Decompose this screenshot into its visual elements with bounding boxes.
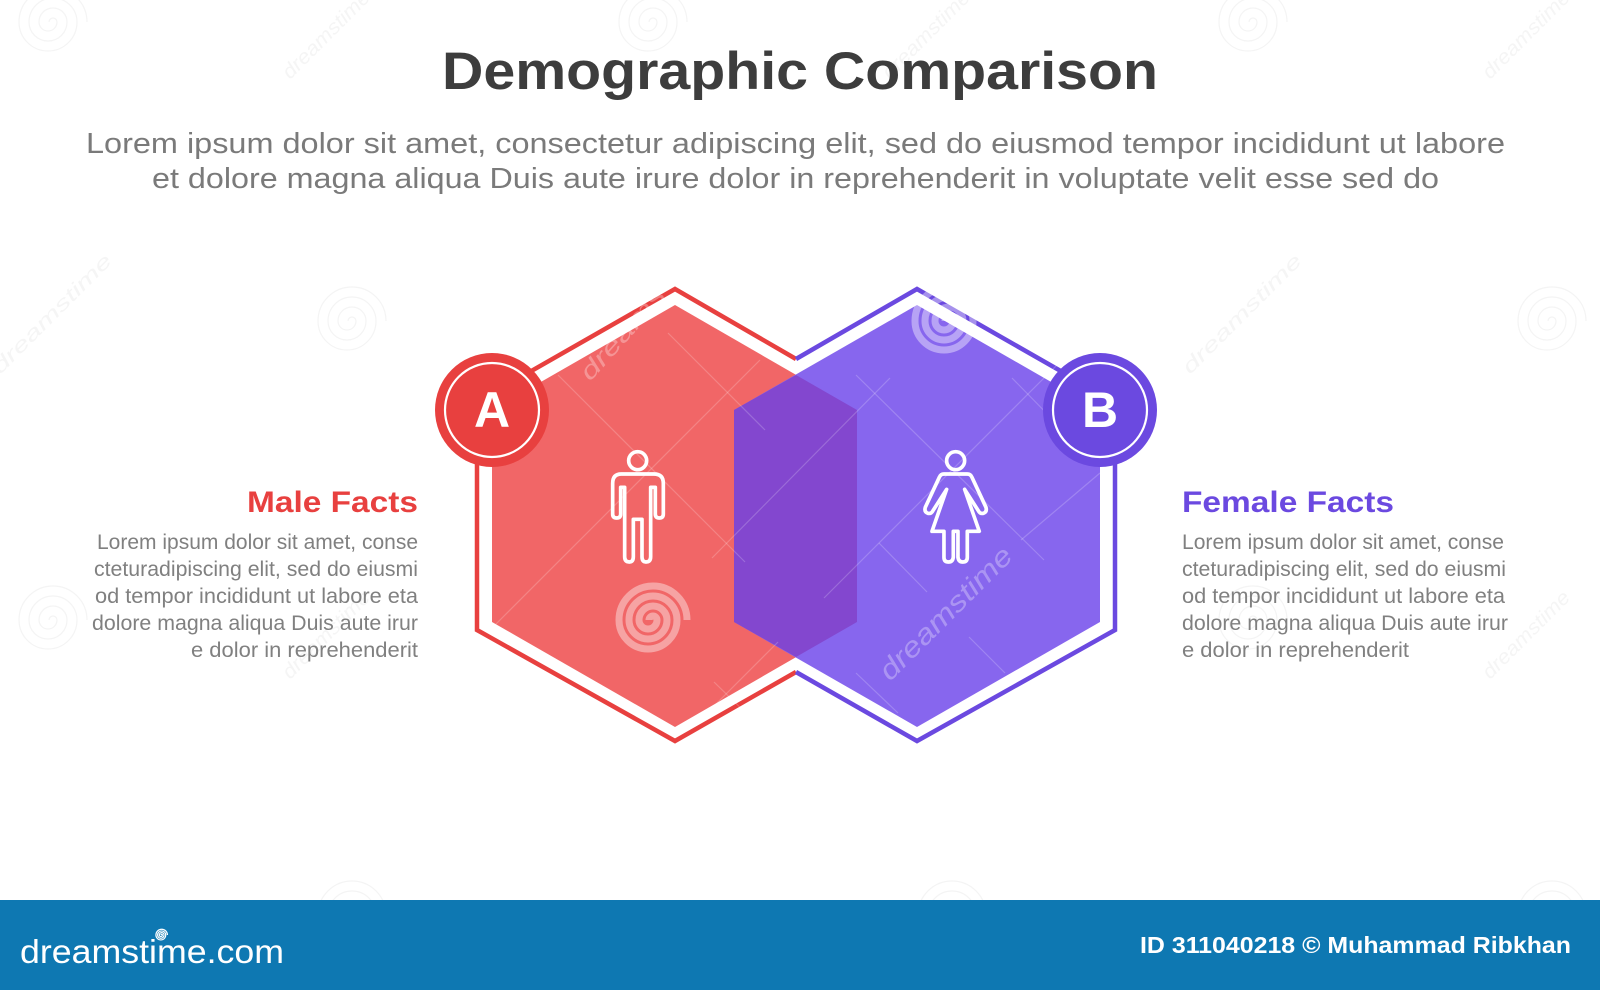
icon: man (613, 452, 663, 562)
badge A: A (474, 382, 510, 438)
watermark spirals on hexagons (619, 287, 983, 649)
text block: male facts: cteturadipiscing elit, sed do eiusmi (94, 558, 418, 581)
text block: female facts: Lorem ipsum dolor sit amet, conse (1182, 531, 1504, 554)
text block: male facts (92, 531, 418, 662)
hexagon A: outline (477, 289, 796, 741)
subtitle: Lorem ipsum dolor sit amet, consectetur adipiscing elit, sed do eiusmod tempor incididunt ut labore (86, 128, 1505, 160)
title: Demographic Comparison (442, 42, 1158, 101)
panel: female facts (1182, 486, 1508, 662)
footer logo: dreamstime.com (20, 933, 284, 970)
overlap area (734, 375, 857, 657)
hexagon diagram (435, 282, 1157, 741)
hexagon B: outline (796, 289, 1115, 741)
text block: female facts (1182, 531, 1508, 662)
text block: female facts: cteturadipiscing elit, sed do eiusmi (1182, 558, 1506, 581)
subtitle: et dolore magna aliqua Duis aute irure dolor in reprehenderit in voluptate velit esse sed do (152, 163, 1439, 195)
watermark text on background: dreamstime (1478, 587, 1575, 684)
watermark text on hexagons: dreamstime (872, 540, 1019, 686)
heading: female facts: Female Facts (1182, 486, 1394, 519)
text block: male facts: Lorem ipsum dolor sit amet, conse (97, 531, 418, 554)
watermark text on hexagons: dreams (574, 282, 671, 386)
text block: male facts: e dolor in reprehenderit (191, 639, 418, 662)
watermark lines on hexagons (493, 332, 1100, 717)
text block: female facts: dolore magna aliqua Duis aute irur (1182, 612, 1508, 635)
badge A (435, 353, 549, 467)
text block: female facts: od tempor incididunt ut labore eta (1182, 585, 1505, 608)
subtitle (86, 128, 1505, 195)
panel: male facts (92, 486, 418, 662)
badge B: B (1082, 382, 1118, 438)
hexagon B: fill (734, 305, 1100, 727)
text block: male facts: dolore magna aliqua Duis aute irur (92, 612, 418, 635)
watermark text on background: dreamstime (1178, 250, 1307, 379)
text block: female facts: e dolor in reprehenderit (1182, 639, 1409, 662)
footer bar (0, 900, 1600, 990)
footer credit: ID 311040218 © Muhammad Ribkhan (1140, 932, 1571, 958)
text block: male facts: od tempor incididunt ut labore eta (95, 585, 418, 608)
badge B (1043, 353, 1157, 467)
hexagon A: fill (492, 305, 857, 727)
watermark text on background: dreamstime (278, 587, 375, 684)
icon: woman (925, 452, 986, 562)
watermark text on hexagons (574, 282, 1019, 686)
heading: male facts: Male Facts (247, 486, 418, 519)
watermark text on background (0, 0, 1575, 684)
